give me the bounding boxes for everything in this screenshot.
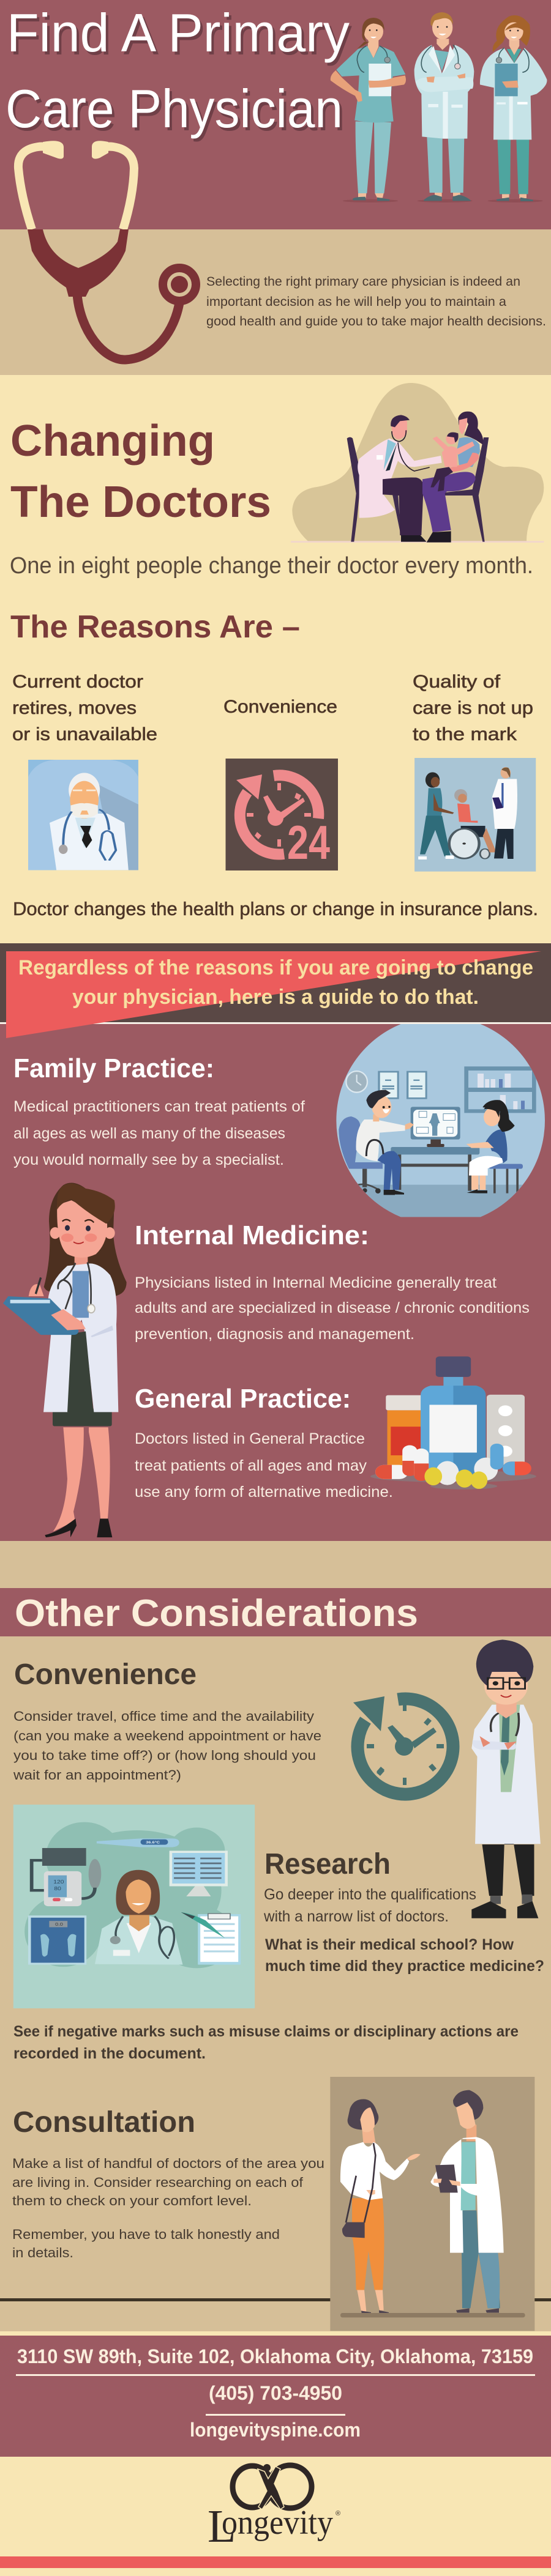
panel: other considerations heading band [0,1588,551,1636]
convenience text: wait for an appointment?) [13,1767,181,1783]
research text: Go deeper into the qualifications [264,1886,476,1903]
negative marks text: See if negative marks such as misuse claims or disciplinary actions are [13,2023,519,2040]
panel: header maroon [0,0,551,229]
heading: other considerations: Other Considerations [15,1592,418,1635]
reason 4 text: Doctor changes the health plans or change in insurance plans. [13,898,538,919]
illustration: medicine bottles and pills [370,1356,536,1490]
logo: longevity: ® [335,2510,340,2517]
logo: longevity: L [208,2501,236,2552]
heading: changing the doctors: Changing [10,417,215,466]
icon: stethoscope [18,141,196,360]
reason 3 text: Quality of [413,672,501,692]
heading: changing the doctors [10,417,271,527]
reason 3 text [413,672,533,744]
consultation text: them to check on your comfort level. [12,2193,252,2208]
heading: convenience: Convenience [14,1658,197,1691]
illustration: research medical tools: 120 [53,1879,64,1885]
icon: 24 hour clock: 24 [287,815,330,869]
convenience text [13,1709,321,1783]
section: family practice text: Medical practitioners can treat patients of [13,1098,305,1115]
section: internal medicine text: prevention, diagnosis and management. [135,1326,414,1343]
title: Care Physician [6,78,343,139]
second doctor coat [414,12,474,201]
reason 1 text [12,672,157,744]
banner text: your physician, here is a guide to do that. [72,985,479,1009]
illustration: female doctor with clipboard [3,1183,127,1537]
section: family practice text: all ages as well as many of the diseases [13,1125,285,1142]
consultation text: in details. [12,2245,73,2260]
panel: spacer tan [0,1541,551,1588]
panel: intro tan [0,229,551,375]
title [6,2,350,139]
research text [263,1886,476,1925]
reason 3 text: to the mark [413,724,517,744]
icon: teal clock [353,1696,453,1794]
icon: 24 hour clock [225,759,338,870]
illustration: research medical tools: 36.6°C [146,1840,160,1844]
heading: general practice: General Practice: [135,1384,351,1414]
section: general practice text: use any form of alternative medicine. [135,1483,393,1501]
convenience text: (can you make a weekend appointment or have [13,1728,321,1743]
intro text: good health and guide you to take major health decisions. [206,314,546,328]
logo: longevity [208,2464,340,2552]
banner text [18,956,533,1009]
illustration: research medical tools: 80 [54,1886,61,1891]
panel: bottom coral bar [0,2556,551,2568]
intro text: Selecting the right primary care physician is indeed an [206,275,520,289]
negative marks text: recorded in the document. [13,2045,206,2062]
first doctor scrubs [331,18,406,201]
heading: consultation: Consultation [13,2106,195,2139]
heading: family practice: Family Practice: [13,1053,214,1083]
section: family practice text: you would normally see by a specialist. [13,1151,284,1168]
illustration: research medical tools: 0.0 [55,1922,63,1927]
reason 1 text: or is unavailable [12,724,157,744]
heading: changing the doctors: The Doctors [10,478,271,527]
illustration: patient and doctor consultation [330,2077,534,2331]
convenience text: Consider travel, office time and the availability [13,1709,314,1724]
logo: longevity: ongevity [222,2504,333,2542]
illustration: research medical tools [13,1805,255,2008]
heading: internal medicine: Internal Medicine: [135,1220,369,1250]
intro text [206,275,546,328]
icon: nurse wheelchair patient doctor [414,758,536,872]
consultation text: Remember, you have to talk honestly and [12,2227,280,2242]
consultation text [12,2156,324,2260]
research questions: What is their medical school? How [265,1936,514,1953]
heading: the reasons are: The Reasons Are – [10,609,300,645]
panel: guide banner [0,943,551,1022]
reason 3 text: care is not up [413,698,533,718]
title: Find A Primary [7,2,350,63]
banner triangle [6,951,541,1038]
section: family practice text [13,1053,305,1168]
panel: footer contact [0,2336,551,2457]
banner text: Regardless of the reasons if you are going to change [18,956,533,979]
illustration: three doctors [331,12,547,202]
male doctor [430,2090,504,2313]
panel: considerations tan [0,1636,551,2331]
section: internal medicine text [135,1220,530,1343]
panel: footer logo [0,2457,551,2576]
icon: senior doctor [28,760,138,870]
heading: research: Research [264,1848,391,1880]
convenience text: you to take time off?) or (how long should you [13,1748,316,1763]
section: general practice text: treat patients of all ages and may [135,1457,367,1474]
illustration: doctor with glasses [471,1639,541,1918]
footer website: longevityspine.com [190,2419,361,2441]
research text: with a narrow list of doctors. [263,1908,449,1925]
intro text: important decision as he will help you to maintain a [206,295,506,309]
footer phone: (405) 703-4950 [209,2382,342,2404]
section: general practice text [135,1384,393,1501]
negative marks text [13,2023,519,2062]
third doctor coat with clipboard [480,15,547,201]
footer address: 3110 SW 89th, Suite 102, Oklahoma City, Oklahoma, 73159 [17,2345,533,2367]
reason 1 text: Current doctor [12,672,143,692]
reason 2 text: Convenience [223,697,337,717]
section: internal medicine text: Physicians listed in Internal Medicine generally treat [135,1274,497,1291]
panel: changing the doctors [0,375,551,943]
woman patient [340,2099,421,2313]
illustration: doctor examining child [291,383,544,543]
section: internal medicine text: adults and are specialized in disease / chronic conditions [135,1299,530,1316]
panel: practice types [0,1022,551,1541]
reason 1 text: retires, moves [12,698,137,718]
consultation text: Make a list of handful of doctors of the area you [12,2156,324,2171]
section: general practice text: Doctors listed in General Practice [135,1430,365,1447]
illustration: doctor's office consultation [336,1024,545,1217]
stat text: One in eight people change their doctor every month. [10,553,533,579]
research questions [265,1936,544,1975]
consultation text: are living in. Consider researching on each of [12,2175,304,2190]
research questions: much time did they practice medicine? [265,1958,544,1975]
